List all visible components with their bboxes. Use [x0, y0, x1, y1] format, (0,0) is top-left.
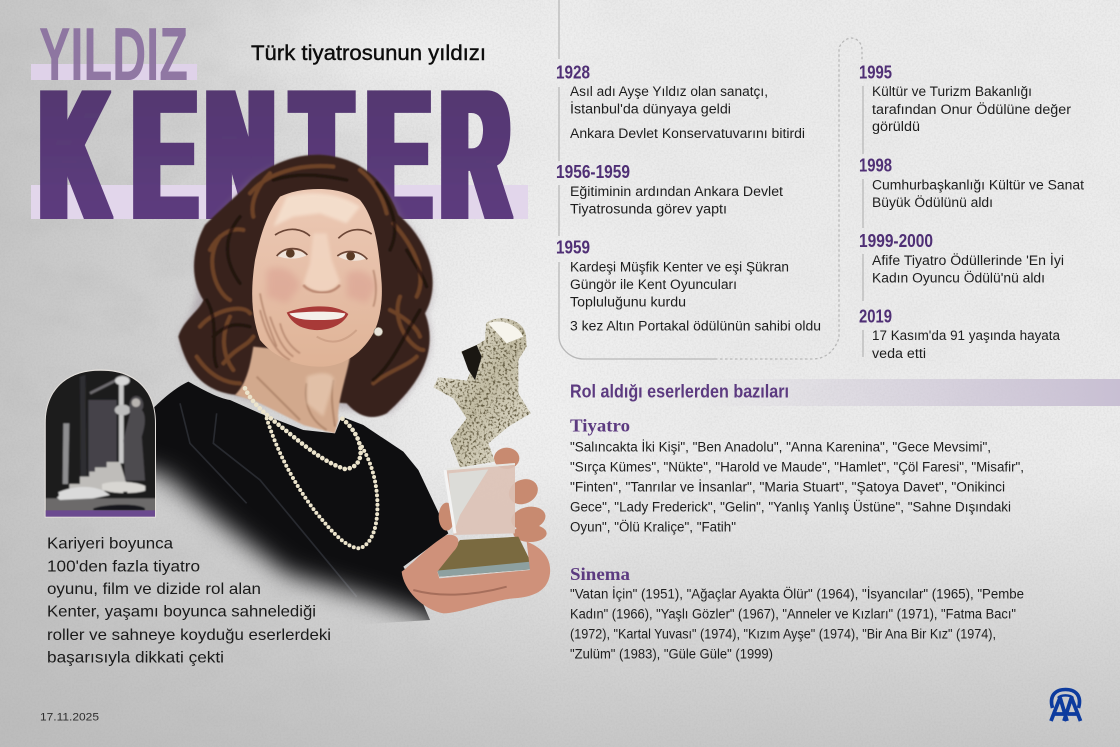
neck [235, 347, 350, 433]
mouth [287, 306, 348, 330]
timeline right column [859, 63, 1084, 361]
theatre list: "Finten", "Tanrılar ve İnsanlar", "Maria Stuart", "Şatoya Davet", "Onikinci [570, 480, 1005, 495]
2019: 2019 [859, 307, 892, 327]
1998: Büyük Ödülünü aldı [872, 195, 993, 210]
1995: Kültür ve Turizm Bakanlığı [872, 84, 1032, 99]
nose shadow [303, 285, 340, 293]
1959: 3 kez Altın Portakal ödülünün sahibi oldu [570, 319, 821, 334]
spiral stairs [69, 462, 127, 495]
timeline connector lines [559, 0, 863, 359]
theatre list: "Salıncakta İki Kişi", "Ben Anadolu", "Anna Karenina", "Gece Mevsimi", [570, 440, 991, 455]
title: Yıldız [31, 12, 197, 96]
theatre list: "Sırça Kümes", "Nükte", "Harold ve Maude", "Hamlet", "Çöl Faresi", "Misafir", [570, 460, 1024, 475]
cinema list: "Zulüm" (1983), "Güle Güle" (1999) [570, 647, 773, 662]
neck wrinkles [257, 377, 335, 430]
1995: 1995 [859, 63, 892, 83]
1928 [556, 62, 805, 141]
standing woman [123, 396, 145, 481]
1956-1959: 1956-1959 [556, 162, 630, 182]
inset theatre photo [43, 369, 157, 518]
paragraph: career summary: Kenter, yaşamı boyunca sahnelediği [47, 604, 316, 621]
paragraph: career summary: oyunu, film ve dizide rol alan [47, 581, 261, 598]
cinema list: Sinema [570, 564, 630, 584]
1959: Güngör ile Kent Oyuncuları [570, 277, 737, 292]
plaque base [437, 537, 531, 577]
2019: veda etti [872, 346, 926, 361]
portrait of Yıldız Kenter with trophy [127, 155, 550, 627]
1959: Kardeşi Müşfik Kenter ve eşi Şükran [570, 260, 789, 274]
1999-2000: Afife Tiyatro Ödüllerinde 'En İyi [872, 253, 1064, 268]
theatre list: Tiyatro [570, 416, 630, 436]
1998 [859, 156, 1084, 210]
title: Yıldız: YILDIZ [39, 12, 188, 96]
1999-2000 [859, 231, 1064, 285]
theatre list: Oyun", "Ölü Kraliçe", "Fatih" [570, 520, 736, 535]
1959: 1959 [556, 238, 590, 258]
section header: works: Rol aldığı eserlerden bazıları [570, 382, 789, 402]
1956-1959 [556, 162, 783, 217]
title: Kenter: KENTER [41, 51, 508, 257]
2019 [859, 307, 1060, 361]
column [119, 380, 124, 463]
1956-1959: Eğitiminin ardından Ankara Devlet [570, 184, 783, 199]
1998: Cumhurbaşkanlığı Kültür ve Sanat [872, 177, 1084, 192]
timeline left column [556, 62, 821, 334]
pearl necklaces [245, 388, 377, 548]
fingers behind trophy [439, 448, 548, 542]
cinema list: "Vatan İçin" (1951), "Ağaçlar Ayakta Ölür" (1964), "İsyancılar" (1965), "Pembe [570, 587, 1024, 602]
theatre list [570, 416, 1024, 535]
1959: Topluluğunu kurdu [570, 294, 686, 310]
eyes [275, 229, 372, 261]
section header: works [560, 379, 1120, 406]
hair [178, 155, 433, 417]
earring [374, 327, 383, 336]
subtitle: Türk tiyatrosunun yıldızı [251, 42, 486, 65]
paragraph: career summary: roller ve sahneye koyduğu eserlerdeki [47, 627, 331, 644]
1995 [859, 63, 1072, 134]
1928: İstanbul'da dünyaya geldi [570, 102, 731, 117]
floor [45, 498, 156, 517]
1928: Asıl adı Ayşe Yıldız olan sanatçı, [570, 84, 768, 99]
theatre list: Gece", "Lady Frederick", "Gelin", "Yanlış Yanlış Üstüne", "Sahne Dışındaki [570, 500, 1011, 515]
1956-1959: Tiyatrosunda görev yaptı [570, 202, 727, 217]
trophy [433, 318, 531, 577]
soft shadow around hair [180, 158, 433, 413]
cinema list: (1972), "Kartal Yuvası" (1974), "Kızım Ayşe" (1974), "Bir Ana Bir Kız" (1974), [570, 627, 996, 642]
top and jacket [127, 382, 448, 627]
1995: tarafından Onur Ödülüne değer [872, 102, 1072, 117]
paragraph: career summary [47, 535, 331, 667]
date: 17.11.2025 [40, 712, 99, 724]
front hand [402, 535, 550, 613]
1995: görüldü [872, 119, 920, 134]
bear statuette [433, 318, 531, 467]
1959 [556, 238, 821, 334]
round platform [102, 482, 145, 493]
lying figure [53, 487, 110, 500]
1999-2000: 1999-2000 [859, 231, 933, 251]
paragraph: career summary: başarısıyla dikkati çekti [47, 650, 224, 667]
face [252, 189, 382, 367]
logo: Anadolu Agency [1051, 690, 1080, 721]
cinema list [570, 564, 1024, 662]
paragraph: career summary: 100'den fazla tiyatro [47, 559, 200, 576]
1928: 1928 [556, 62, 590, 82]
1998: 1998 [859, 156, 892, 176]
1928: Ankara Devlet Konservatuvarını bitirdi [570, 126, 805, 141]
1999-2000: Kadın Oyuncu Ödülü'nü aldı [872, 270, 1045, 285]
2019: 17 Kasım'da 91 yaşında hayata [872, 328, 1060, 343]
cinema list: Kadın" (1966), "Yaşlı Gözler" (1967), "Anneler ve Kızları" (1971), "Fatma Bacı" [570, 607, 1016, 622]
paragraph: career summary: Kariyeri boyunca [47, 535, 173, 552]
